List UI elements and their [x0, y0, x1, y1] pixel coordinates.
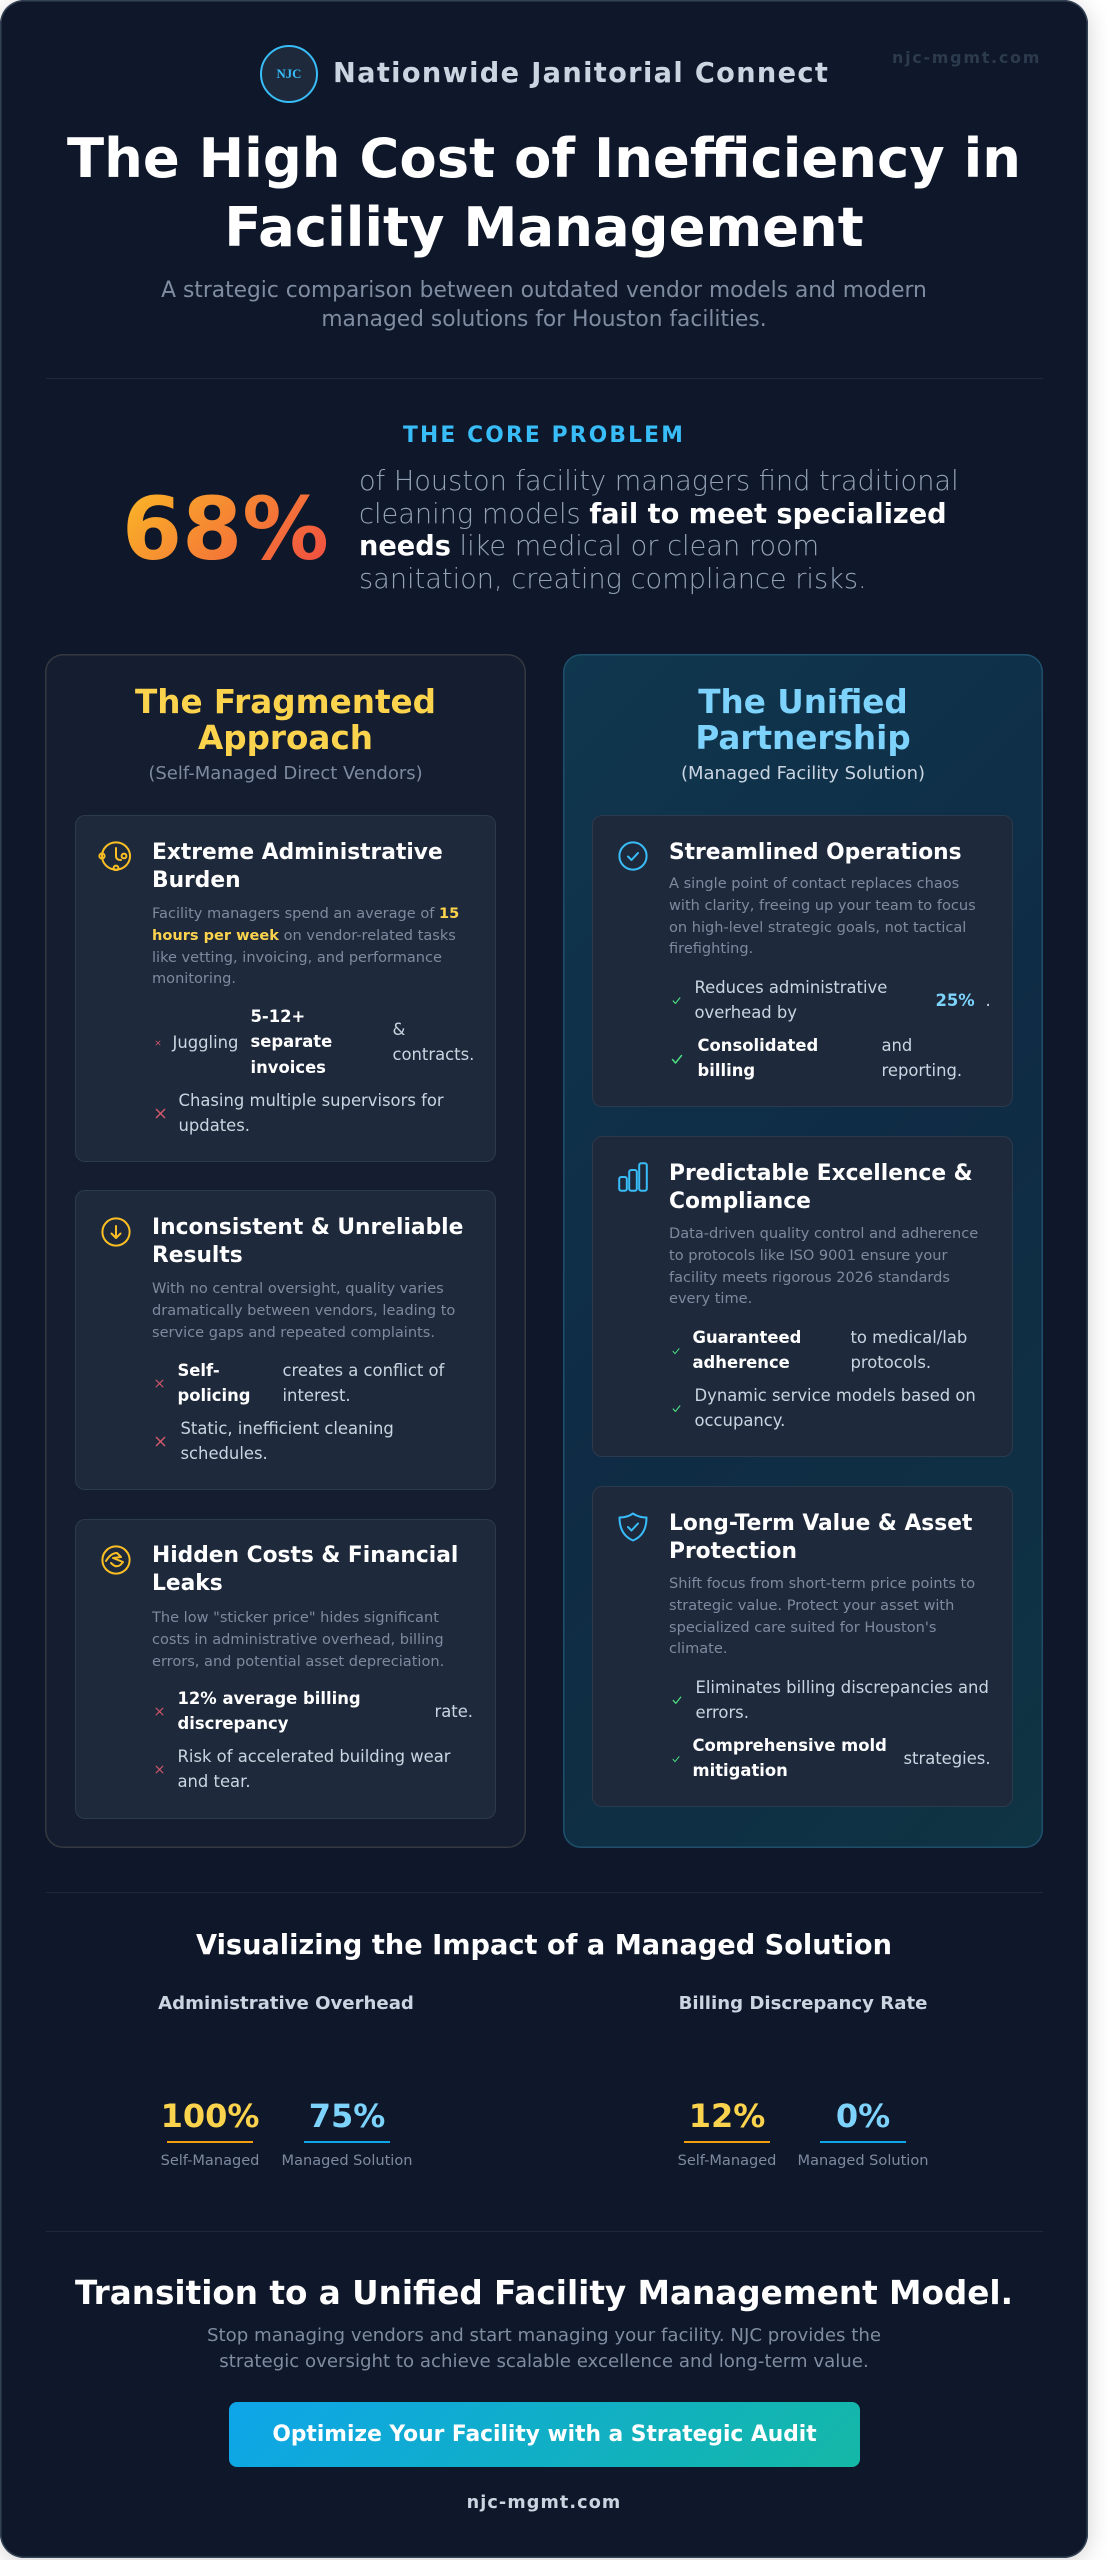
panel heading	[695, 683, 911, 756]
list item: static schedules: schedules.	[180, 1444, 268, 1463]
card description: dramatically between vendors, leading to	[152, 1302, 455, 1319]
card description: service gaps and repeated complaints.	[152, 1324, 435, 1341]
icon: down arrow circle	[101, 1217, 131, 1247]
list item: dynamic models	[672, 1386, 976, 1430]
card: streamlined operations	[592, 815, 1013, 1107]
list item: juggling invoices: contracts.	[392, 1045, 474, 1064]
list item: eliminates discrepancies: errors.	[696, 1703, 749, 1722]
list item: guaranteed adherence: to medical/lab	[850, 1328, 967, 1347]
card description: With no central oversight, quality varies	[152, 1280, 444, 1297]
stat description: needs like medical or clean room	[359, 531, 819, 562]
list item: reduces overhead	[672, 978, 991, 1022]
brand name: Nationwide Janitorial Connect	[333, 58, 829, 89]
subtitle: managed solutions for Houston facilities.	[321, 307, 767, 332]
list item: self-policing: Self-	[178, 1361, 220, 1380]
list item: reduces overhead: 25%	[936, 991, 975, 1010]
list item: chasing supervisors: Chasing multiple supervisors for	[178, 1091, 444, 1110]
icon: bar chart	[618, 1162, 648, 1192]
card description	[669, 1225, 978, 1307]
card description	[152, 905, 459, 987]
card description: to protocols like ISO 9001 ensure your	[669, 1247, 948, 1264]
list item: static schedules: Static, inefficient cleaning	[180, 1419, 394, 1438]
list item: static schedules	[156, 1419, 394, 1463]
value: managed solution: 75%	[309, 2097, 385, 2135]
list item: consolidated billing: reporting.	[882, 1061, 962, 1080]
panel heading: Approach	[198, 718, 373, 756]
card title: Protection	[669, 1539, 797, 1564]
card description: facility meets rigorous 2026 standards	[669, 1269, 950, 1286]
card title	[152, 1215, 463, 1268]
list item: self-policing: creates a conflict of	[282, 1361, 444, 1380]
list item: juggling invoices: Juggling	[172, 1033, 238, 1052]
logo badge	[260, 45, 318, 103]
card description: monitoring.	[152, 970, 236, 987]
list item: juggling invoices: invoices	[250, 1058, 326, 1077]
call to action button	[229, 2402, 860, 2467]
card description: Shift focus from short-term price points to	[669, 1575, 975, 1592]
stat: 68%: 68%	[122, 480, 329, 580]
logo badge: NJC	[277, 67, 301, 81]
list item: dynamic models: Dynamic service models based on	[694, 1386, 976, 1405]
list item: mold mitigation: Comprehensive mold	[692, 1736, 887, 1755]
panel: the unified partnership	[563, 654, 1043, 1848]
footer url: njc-mgmt.com	[467, 2493, 621, 2513]
panel: the fragmented approach	[45, 654, 526, 1848]
card title	[669, 1161, 973, 1214]
list item: self-policing	[156, 1361, 445, 1405]
card description	[669, 1575, 975, 1657]
bar: managed solution	[820, 2141, 906, 2143]
panel subheading: (Managed Facility Solution)	[681, 763, 925, 784]
call to action button: Optimize Your Facility with a Strategic Audit	[272, 2422, 817, 2447]
closing text	[207, 2325, 881, 2372]
chart: administrative overhead	[158, 1993, 414, 2169]
label: managed solution: Managed Solution	[282, 2152, 412, 2169]
card description: firefighting.	[669, 940, 753, 957]
card: inconsistent results	[75, 1190, 496, 1490]
card: predictable excellence	[592, 1136, 1013, 1457]
title	[67, 127, 1021, 259]
list item: guaranteed adherence	[672, 1328, 967, 1372]
bar: managed solution	[304, 2141, 390, 2143]
list item: consolidated billing: and	[882, 1036, 912, 1055]
list item: self-policing: interest.	[282, 1386, 351, 1405]
stat description: cleaning models fail to meet specialized	[359, 498, 947, 530]
card title: Extreme Administrative	[152, 840, 443, 865]
panel heading: The Fragmented	[135, 683, 436, 721]
card description: every time.	[669, 1290, 752, 1307]
card: extreme administrative burden	[75, 815, 496, 1162]
panel heading: Partnership	[695, 718, 911, 756]
list item: mold mitigation: mitigation	[692, 1761, 788, 1780]
card title: Streamlined Operations	[669, 840, 962, 865]
value: self-managed: 100%	[161, 2097, 259, 2135]
list item: juggling invoices: 5-12+	[250, 1007, 305, 1026]
panel heading	[135, 683, 436, 756]
list item: chasing supervisors	[156, 1091, 444, 1135]
list item: guaranteed adherence: protocols.	[850, 1353, 931, 1372]
card: hidden costs	[75, 1519, 496, 1819]
value: managed solution: 0%	[836, 2097, 890, 2135]
list item: juggling invoices	[156, 1007, 474, 1077]
list item: building wear	[156, 1747, 451, 1791]
card description	[669, 875, 976, 957]
card description: Data-driven quality control and adherence	[669, 1225, 978, 1242]
list item: self-policing: policing	[178, 1386, 250, 1405]
chart: billing discrepancy rate	[678, 1993, 928, 2169]
section label: the core problem: THE CORE PROBLEM	[403, 423, 685, 448]
icon: coin with swirl	[101, 1545, 131, 1575]
list item: mold mitigation	[672, 1736, 991, 1780]
list item: guaranteed adherence: Guaranteed	[692, 1328, 801, 1347]
list item: building wear: Risk of accelerated building wear	[178, 1747, 451, 1766]
list item: consolidated billing: billing	[698, 1061, 755, 1080]
card description: The low "sticker price" hides significant	[152, 1609, 439, 1626]
card title	[152, 1543, 458, 1596]
stat description: sanitation, creating compliance risks.	[359, 564, 867, 594]
icon: check circle	[618, 841, 648, 871]
card title: Results	[152, 1243, 243, 1268]
card title: Predictable Excellence &	[669, 1161, 973, 1186]
list item: reduces overhead: overhead by	[694, 1003, 797, 1022]
subtitle: A strategic comparison between outdated vendor models and modern	[161, 278, 927, 303]
card description: specialized care suited for Houston's	[669, 1619, 936, 1636]
list item: eliminates discrepancies: Eliminates billing discrepancies and	[696, 1678, 989, 1697]
card title: Burden	[152, 868, 241, 893]
panel subheading: (Self-Managed Direct Vendors)	[148, 763, 423, 784]
bar: self-managed	[167, 2141, 253, 2143]
list item: juggling invoices: separate	[250, 1032, 332, 1051]
card description: like vetting, invoicing, and performance	[152, 949, 442, 966]
card description: strategic value. Protect your asset with	[669, 1597, 954, 1614]
card title: Inconsistent & Unreliable	[152, 1215, 463, 1240]
icon: clock with nodes	[98, 841, 131, 871]
list item: dynamic models: occupancy.	[694, 1411, 785, 1430]
card title	[669, 1511, 972, 1564]
card description: costs in administrative overhead, billing	[152, 1631, 444, 1648]
section heading: impact: Visualizing the Impact of a Managed Solution	[196, 1930, 892, 1961]
card description: errors, and potential asset depreciation.	[152, 1653, 444, 1670]
card description: A single point of contact replaces chaos	[669, 875, 959, 892]
list item: billing discrepancy: discrepancy	[178, 1714, 288, 1733]
stat description: of Houston facility managers find traditional	[359, 466, 959, 497]
card title: Compliance	[669, 1189, 811, 1214]
list item: chasing supervisors: updates.	[178, 1116, 250, 1135]
closing text: Stop managing vendors and start managing your facility. NJC provides the	[207, 2325, 881, 2346]
card: long-term value	[592, 1486, 1013, 1807]
subtitle	[161, 278, 927, 332]
list item: billing discrepancy	[156, 1689, 473, 1733]
list item: billing discrepancy: rate.	[434, 1702, 473, 1721]
list item: reduces overhead: .	[986, 991, 991, 1010]
label: managed solution: Managed Solution	[798, 2152, 928, 2169]
chart title: Administrative Overhead	[158, 1993, 414, 2014]
card title: Leaks	[152, 1571, 223, 1596]
list item: consolidated billing	[672, 1036, 962, 1080]
list item: building wear: and tear.	[178, 1772, 251, 1791]
card description	[152, 1280, 455, 1341]
card description: hours per week on vendor-related tasks	[152, 927, 456, 944]
top watermark url: njc-mgmt.com	[892, 48, 1041, 67]
card description	[152, 1609, 444, 1670]
panel heading: The Unified	[698, 683, 908, 721]
card title	[152, 840, 443, 893]
list item: guaranteed adherence: adherence	[692, 1353, 790, 1372]
card description: climate.	[669, 1640, 727, 1657]
bar: self-managed	[684, 2141, 770, 2143]
icon: shield check	[618, 1512, 648, 1542]
label: self-managed: Self-Managed	[161, 2152, 259, 2169]
card description: Facility managers spend an average of 15	[152, 905, 459, 922]
stat description	[359, 466, 959, 594]
list item: reduces overhead: Reduces administrative	[694, 978, 887, 997]
list item: billing discrepancy: 12% average billing	[178, 1689, 361, 1708]
title: Facility Management	[224, 196, 864, 259]
card title: Long-Term Value & Asset	[669, 1511, 972, 1536]
value: self-managed: 12%	[689, 2097, 765, 2135]
title: The High Cost of Inefficiency in	[67, 127, 1021, 190]
list item: consolidated billing: Consolidated	[698, 1036, 818, 1055]
card title: Hidden Costs & Financial	[152, 1543, 458, 1568]
closing text: strategic oversight to achieve scalable excellence and long-term value.	[219, 2351, 869, 2372]
card description: with clarity, freeing up your team to focus	[669, 897, 976, 914]
card description: on high-level strategic goals, not tactical	[669, 919, 966, 936]
label: self-managed: Self-Managed	[678, 2152, 776, 2169]
list item: juggling invoices: &	[392, 1020, 405, 1039]
chart title: Billing Discrepancy Rate	[679, 1993, 927, 2014]
closing headline: Transition to a Unified Facility Management Model.	[75, 2274, 1013, 2312]
list item: mold mitigation: strategies.	[904, 1749, 991, 1768]
list item: eliminates discrepancies	[672, 1678, 989, 1722]
